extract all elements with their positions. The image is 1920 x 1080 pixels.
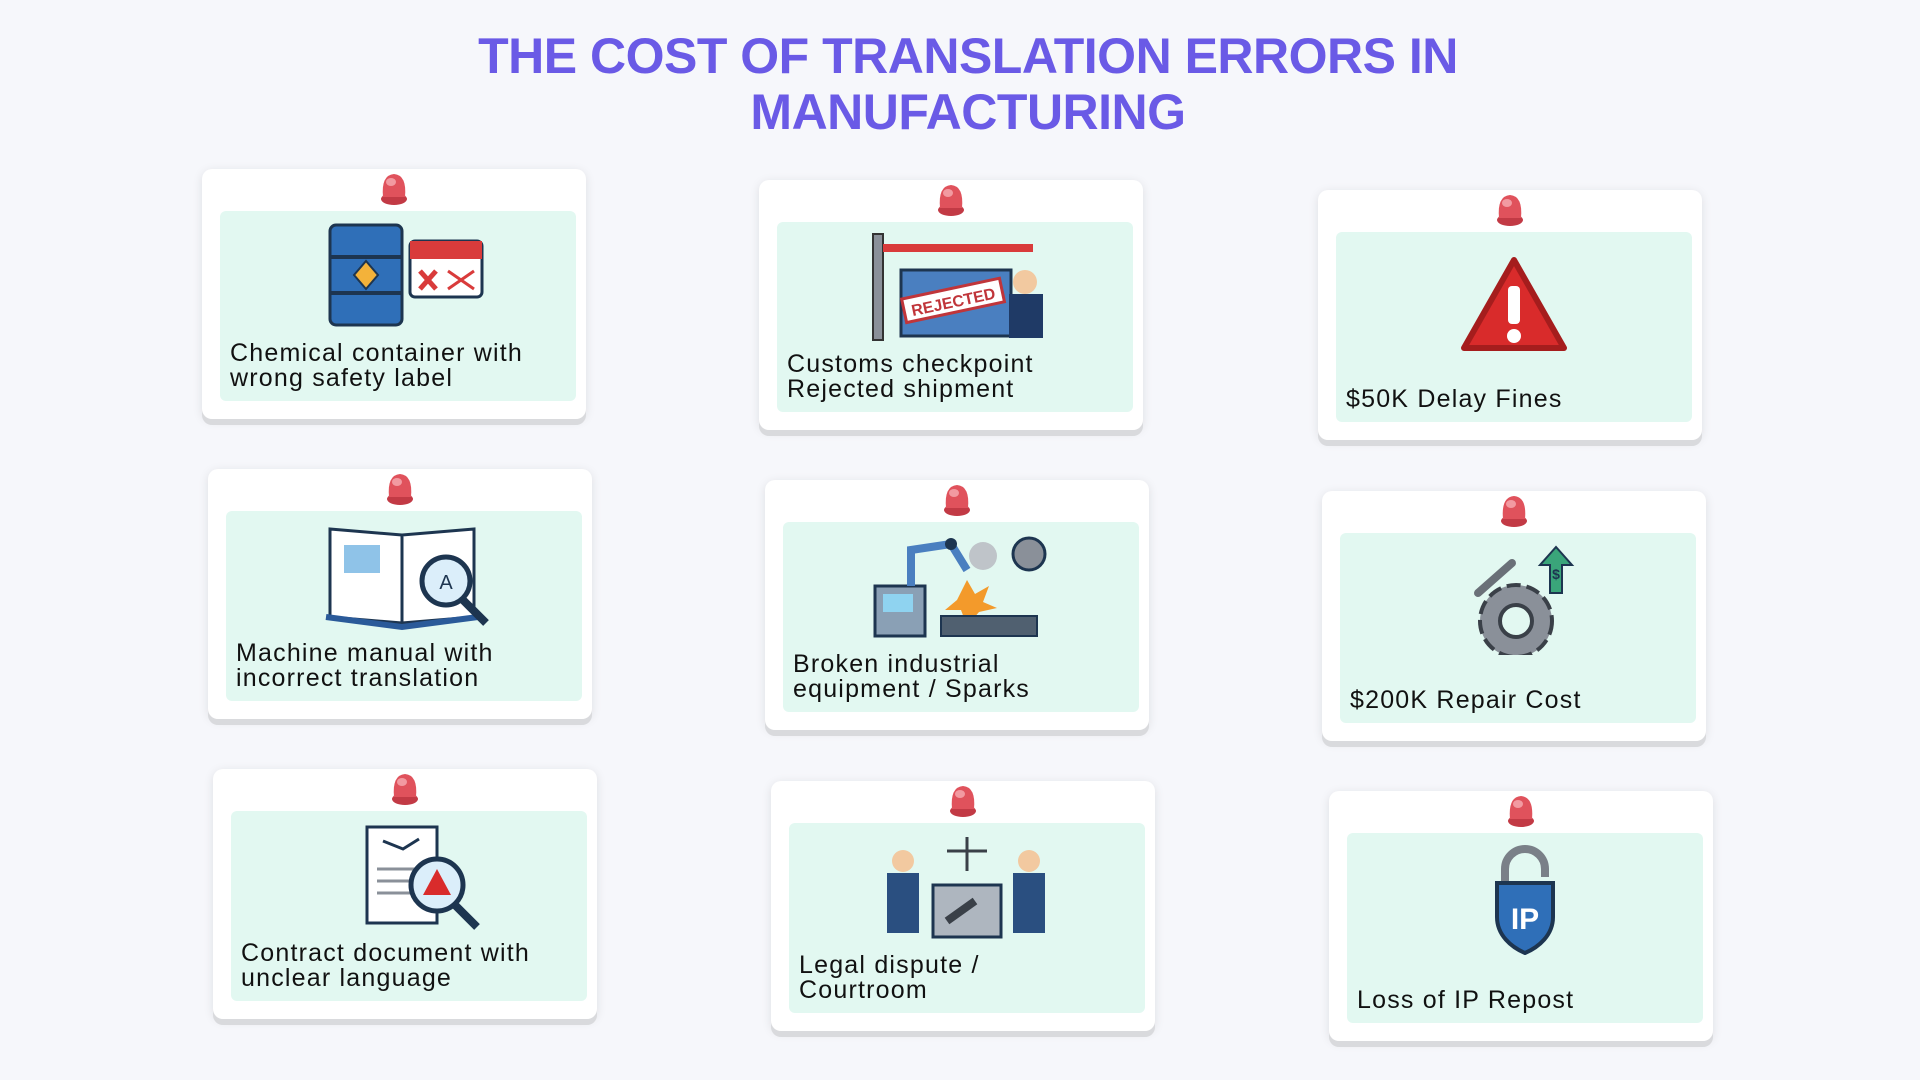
pin [938,185,964,216]
label: Contract document with [241,939,530,967]
icon: book with magnifier: A [439,572,453,594]
card: loss of IP [1329,791,1713,1041]
label: $50K Delay Fines [1346,385,1563,413]
label: Legal dispute / [799,951,980,979]
icon: factory sparks [874,536,1046,638]
icon: barrel and warning label [328,224,484,326]
card: repair cost [1322,491,1706,741]
label: unclear language [241,964,452,992]
pin [1508,796,1534,827]
label: Courtroom [799,976,928,1004]
pin [1497,195,1523,226]
card: chemical container [202,169,586,419]
card: legal dispute [771,781,1155,1031]
label: Chemical container with [230,339,523,367]
icon: warning triangle [1461,257,1567,351]
pin [944,485,970,516]
pin [381,174,407,205]
icon: broken padlock shield [1495,845,1555,955]
card: machine manual [208,469,592,719]
label: Machine manual with [236,639,494,667]
pin [950,786,976,817]
label [230,339,523,392]
pin [1501,496,1527,527]
icon: broken padlock shield: IP [1511,903,1539,936]
pin [387,474,413,505]
label [787,350,1034,403]
title [478,28,1458,140]
icon: rejected container [872,233,1043,341]
icon: courtroom [887,837,1045,938]
label [799,951,980,1004]
label: incorrect translation [236,664,479,692]
title: MANUFACTURING [750,84,1186,140]
card: delay fines [1318,190,1702,440]
card: broken equipment [765,480,1149,730]
label: Customs checkpoint [787,350,1034,378]
card: contract document [213,769,597,1019]
icon: rejected container: REJECTED [910,286,997,320]
label: Rejected shipment [787,375,1014,403]
label: wrong safety label [230,364,453,392]
label: equipment / Sparks [793,675,1030,703]
icon: gear wrench: $ [1552,566,1560,582]
label: Loss of IP Repost [1357,986,1574,1014]
label: Broken industrial [793,650,1000,678]
icon: gear wrench [1474,546,1574,655]
icon: book with magnifier [326,527,489,630]
pin [392,774,418,805]
card: customs checkpoint [759,180,1143,430]
label: $200K Repair Cost [1350,686,1582,714]
label [793,650,1030,703]
icon: contract magnifier [366,826,480,930]
title: THE COST OF TRANSLATION ERRORS IN [478,28,1458,84]
label [236,639,494,692]
label [241,939,530,992]
